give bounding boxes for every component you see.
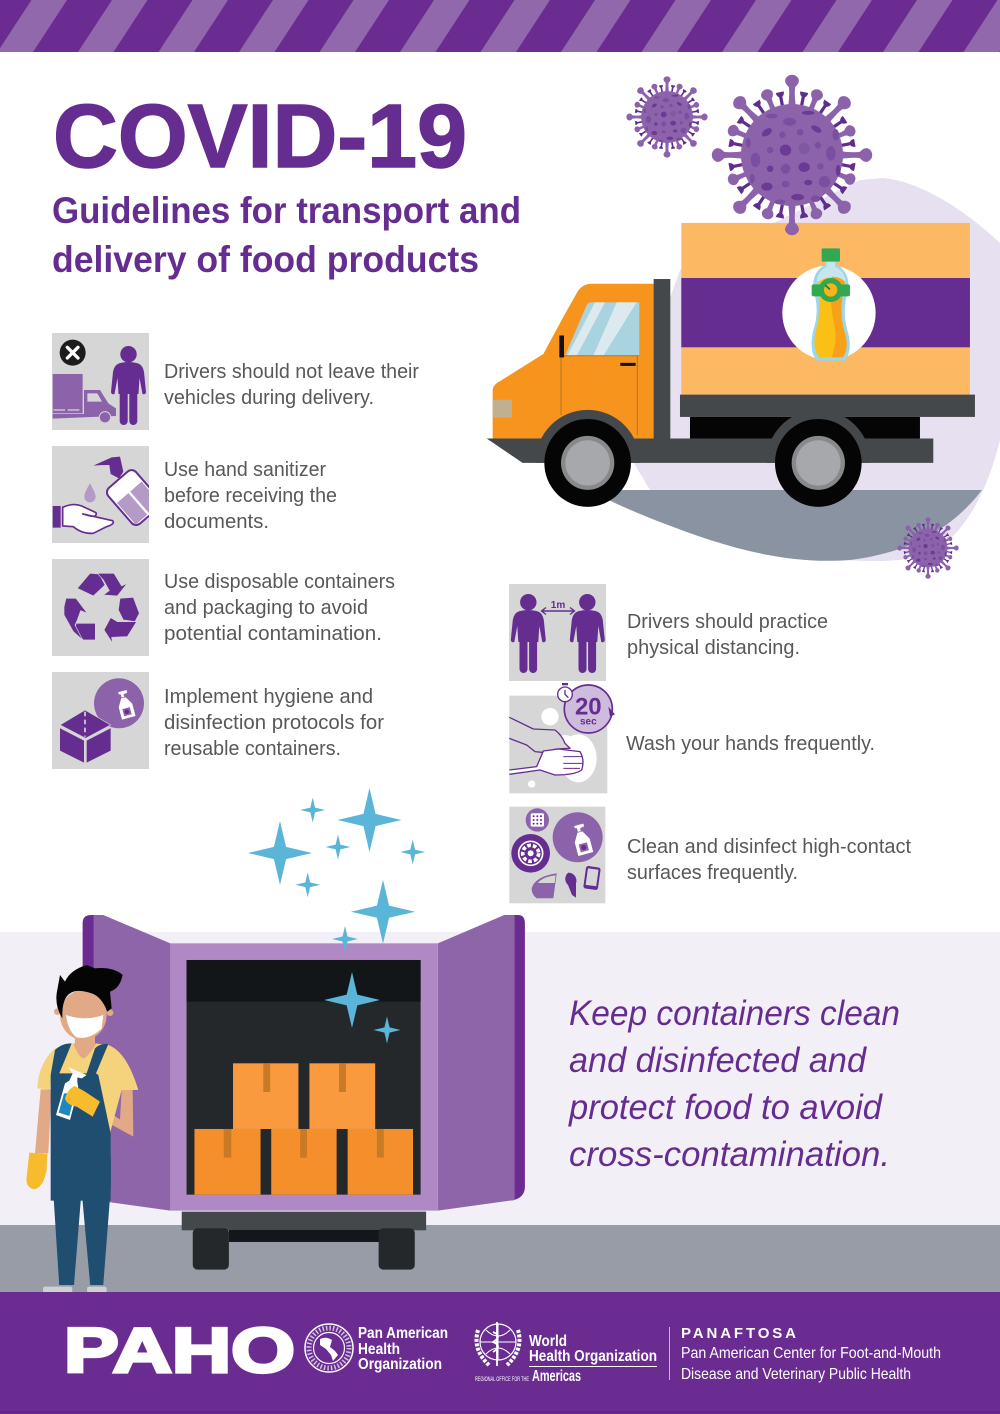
truck rear (83, 915, 525, 1270)
logo: PANAFTOSA: PANAFTOSA (681, 1325, 796, 1342)
logo: WHO: Americas (532, 1368, 581, 1385)
text: Drivers should practice (627, 610, 828, 633)
text (627, 610, 828, 659)
lavender background blob (620, 178, 1000, 561)
text (164, 570, 395, 645)
icon: hand washing 20 sec: 20 (575, 693, 602, 720)
guideline: clean surfaces (509, 807, 911, 903)
logo: WHO (475, 1322, 657, 1385)
truck (487, 223, 975, 507)
illustration: delivery truck with viruses (487, 75, 1000, 561)
icon: small virus top (626, 76, 708, 158)
text: documents. (164, 510, 269, 533)
road band (0, 1225, 1000, 1292)
guideline: stay in vehicle (52, 333, 419, 430)
sparkles (248, 788, 425, 1044)
icon: 1m distance (509, 584, 606, 681)
text: disinfection protocols for (164, 711, 384, 734)
icon: hand sanitizer (52, 446, 149, 543)
icon: juice bottle (811, 248, 850, 361)
logo: PANAFTOSA: Pan American Center for Foot-and-Mouth (681, 1345, 941, 1362)
logo: PAHO (64, 1316, 448, 1386)
virus large (712, 75, 872, 235)
text: Use hand sanitizer (164, 458, 326, 481)
logo: PAHO: Pan American (358, 1325, 448, 1342)
text: surfaces frequently. (627, 861, 798, 884)
top striped band (0, 0, 1000, 52)
worker legs (43, 1157, 111, 1293)
illustration: open truck rear with boxes and worker (26, 788, 525, 1293)
text: and packaging to avoid (164, 596, 368, 619)
text (627, 835, 911, 884)
icon: box and spray (52, 672, 149, 769)
logo: PANAFTOSA: Disease and Veterinary Public Health (681, 1366, 911, 1383)
text: Clean and disinfect high-contact (627, 835, 911, 858)
guideline: wash hands (509, 683, 875, 793)
callout: and disinfected and (569, 1041, 867, 1080)
logo: PAHO: PAHO (64, 1316, 295, 1386)
logo: WHO: Health Organization (529, 1348, 657, 1365)
text: Implement hygiene and (164, 685, 373, 708)
subtitle: Guidelines for transport and (52, 190, 521, 231)
text: Drivers should not leave their (164, 360, 419, 383)
text: potential contamination. (164, 622, 382, 645)
callout (568, 994, 900, 1174)
logo: PAHO: Health (358, 1341, 400, 1358)
icon: 1m distance: 1m (551, 600, 565, 611)
logo: WHO: REGIONAL OFFICE FOR THE (475, 1377, 529, 1383)
title: COVID-19 (53, 87, 467, 187)
subtitle (52, 190, 521, 280)
text: Wash your hands frequently. (626, 732, 875, 755)
text: before receiving the (164, 484, 337, 507)
road shadow (603, 490, 982, 561)
footer (0, 1292, 1000, 1414)
icon: recycling (52, 559, 149, 656)
guideline: hand sanitizer (52, 446, 337, 543)
text (164, 685, 384, 760)
text: reusable containers. (164, 737, 341, 760)
icon: hand washing 20 sec: sec (580, 716, 597, 727)
logo: PAHO: Organization (358, 1356, 442, 1373)
text: Use disposable containers (164, 570, 395, 593)
worker upper body (26, 965, 138, 1201)
logo: PANAFTOSA (681, 1325, 941, 1383)
text (164, 458, 337, 533)
subtitle: delivery of food products (52, 239, 479, 280)
callout: cross-contamination. (569, 1135, 890, 1174)
text: vehicles during delivery. (164, 386, 374, 409)
icon: no leaving vehicle (52, 333, 149, 430)
worker (26, 965, 138, 1293)
callout: protect food to avoid (568, 1088, 884, 1127)
text: physical distancing. (627, 636, 800, 659)
icon: high-contact surfaces (509, 807, 605, 903)
logo: WHO: World (529, 1333, 567, 1350)
lower lavender band (0, 932, 1000, 1225)
icon: small virus bottom (897, 517, 959, 579)
guideline: physical distancing (509, 584, 828, 681)
guideline: hygiene protocols (52, 672, 384, 769)
icon: hand washing 20 sec (509, 683, 615, 793)
text (164, 360, 419, 409)
callout: Keep containers clean (569, 994, 900, 1033)
guideline: disposable containers (52, 559, 395, 656)
